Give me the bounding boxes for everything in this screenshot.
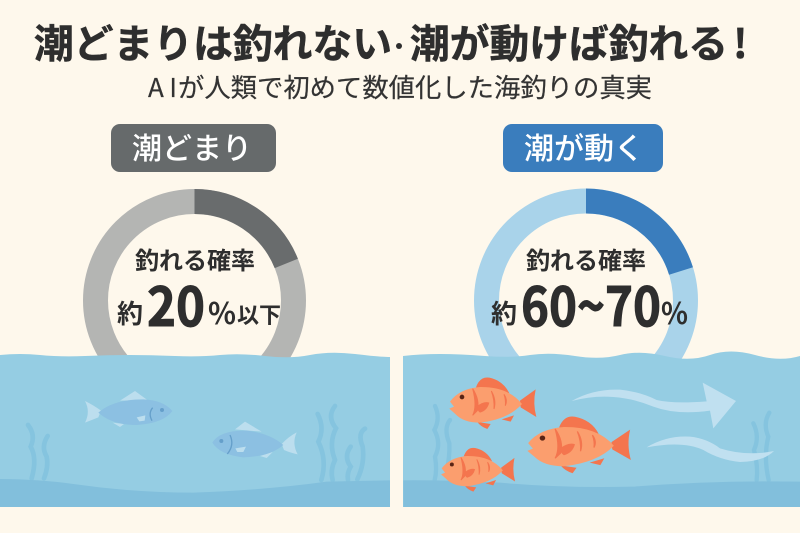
probability label: moving tide: 釣れる確率 (526, 241, 646, 276)
probability label: slack tide: 釣れる確率 (135, 241, 255, 276)
fish: red small (441, 448, 515, 492)
label: moving tide (503, 124, 663, 172)
seabed (0, 479, 390, 507)
label: slack tide: 潮どまり (132, 124, 252, 168)
title: 潮どまりは釣れない (34, 13, 392, 70)
seabed (403, 480, 800, 507)
panel: moving tide (403, 124, 800, 507)
label: moving tide: 潮が動く (524, 124, 644, 168)
donut chart: moving tide (486, 201, 686, 400)
fish: red large (527, 417, 631, 473)
probability value: 60 to 70 percent: % (661, 289, 688, 333)
label: slack tide (111, 124, 276, 172)
seaweed: right cluster (753, 413, 769, 480)
current arrow: lower (647, 437, 774, 462)
fish: red medium (449, 377, 536, 429)
water scene: slack tide (0, 353, 390, 507)
title: ! (733, 13, 748, 70)
probability value: 60 to 70 percent: 約 (491, 294, 517, 331)
probability value: 60 to 70 percent: 60~70 (521, 263, 661, 342)
seaweed: right cluster (318, 406, 365, 480)
subtitle: AI (148, 68, 177, 105)
title (34, 13, 748, 70)
fish: upper grey-blue (85, 391, 172, 427)
panel: slack tide (0, 124, 390, 507)
donut chart: slack tide (96, 202, 294, 400)
current arrow: upper (572, 383, 736, 428)
subtitle: が人類で初めて数値化した海釣りの真実 (178, 68, 652, 105)
seaweed: left cluster (28, 425, 48, 478)
seaweed: left cluster (434, 406, 450, 480)
probability value: 20 percent or less: 以下 (237, 298, 281, 330)
probability value: 20 percent or less (117, 263, 281, 342)
probability value: 20 percent or less: 約 (117, 294, 143, 331)
probability value: 20 percent or less: % (208, 289, 236, 333)
water scene: moving tide (403, 352, 800, 507)
title: 潮が動けば釣れる (410, 13, 728, 70)
fish: lower grey-blue (212, 422, 298, 458)
probability value: 20 percent or less: 20 (147, 263, 205, 342)
